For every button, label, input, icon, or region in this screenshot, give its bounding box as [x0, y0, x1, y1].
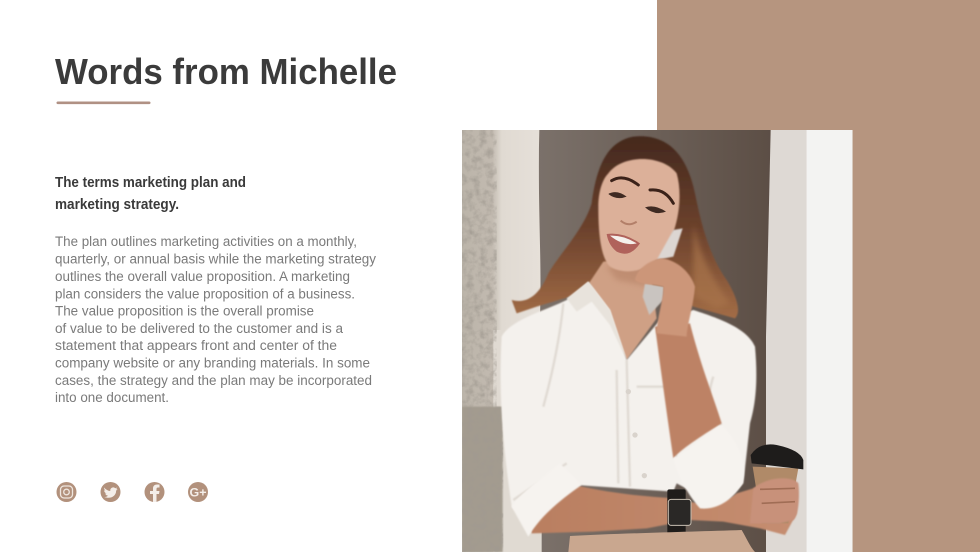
body text: cases, the strategy and the plan may be incorporated: [55, 373, 372, 388]
phone: [643, 228, 683, 315]
mouth: [607, 234, 640, 254]
body text: quarterly, or annual basis while the marketing strategy: [55, 252, 376, 266]
subheading: marketing strategy.: [55, 197, 179, 213]
social icons: [56, 482, 208, 502]
shirt collar: [567, 282, 627, 360]
shirt folds: [513, 303, 722, 500]
lower arm: [530, 483, 797, 535]
title: Words from Michelle: [55, 51, 397, 92]
photo: woman on the phone holding a coffee: [462, 130, 853, 552]
subheading: The terms marketing plan and: [55, 175, 246, 191]
eyebrows: [612, 178, 673, 203]
icon: google plus: [188, 482, 208, 502]
nose: [621, 221, 637, 224]
body text: plan considers the value proposition of a business.: [55, 286, 355, 302]
face: [598, 159, 680, 271]
beige skirt: [568, 530, 755, 552]
icon: instagram: [56, 482, 76, 502]
eyes: [608, 192, 666, 213]
body text: [55, 234, 376, 405]
icon: google plus: G+: [190, 486, 206, 500]
left rolled sleeve: [512, 463, 582, 537]
rolled sleeve: [673, 425, 744, 509]
neck shadow: [608, 268, 644, 286]
hair highlight: [691, 230, 726, 305]
icon: twitter: [100, 482, 120, 502]
background panel: [657, 0, 980, 552]
hand on cup: [750, 478, 799, 523]
hand on phone: [635, 258, 695, 337]
shirt buttons: [626, 389, 647, 478]
watch: [667, 489, 691, 534]
white shirt: [501, 282, 756, 527]
body text: The plan outlines marketing activities on a monthly,: [55, 234, 357, 249]
body text: outlines the overall value proposition. A marketing: [55, 269, 350, 284]
title underline: [56, 102, 150, 104]
concrete wall: [462, 130, 542, 552]
neck and chest: [589, 257, 657, 360]
body text: company website or any branding materials. In some: [55, 356, 370, 370]
subheading: [55, 175, 246, 213]
body text: into one document.: [55, 390, 169, 405]
long hair: [512, 136, 738, 318]
body text: statement that appears front and center of the: [55, 338, 337, 353]
body text: The value proposition is the overall promise: [55, 304, 314, 318]
raised forearm: [655, 323, 722, 458]
body text: of value to be delivered to the customer and is a: [55, 321, 343, 336]
coffee cup: [751, 444, 803, 523]
photo background: [538, 130, 853, 552]
icon: facebook: [144, 482, 164, 502]
